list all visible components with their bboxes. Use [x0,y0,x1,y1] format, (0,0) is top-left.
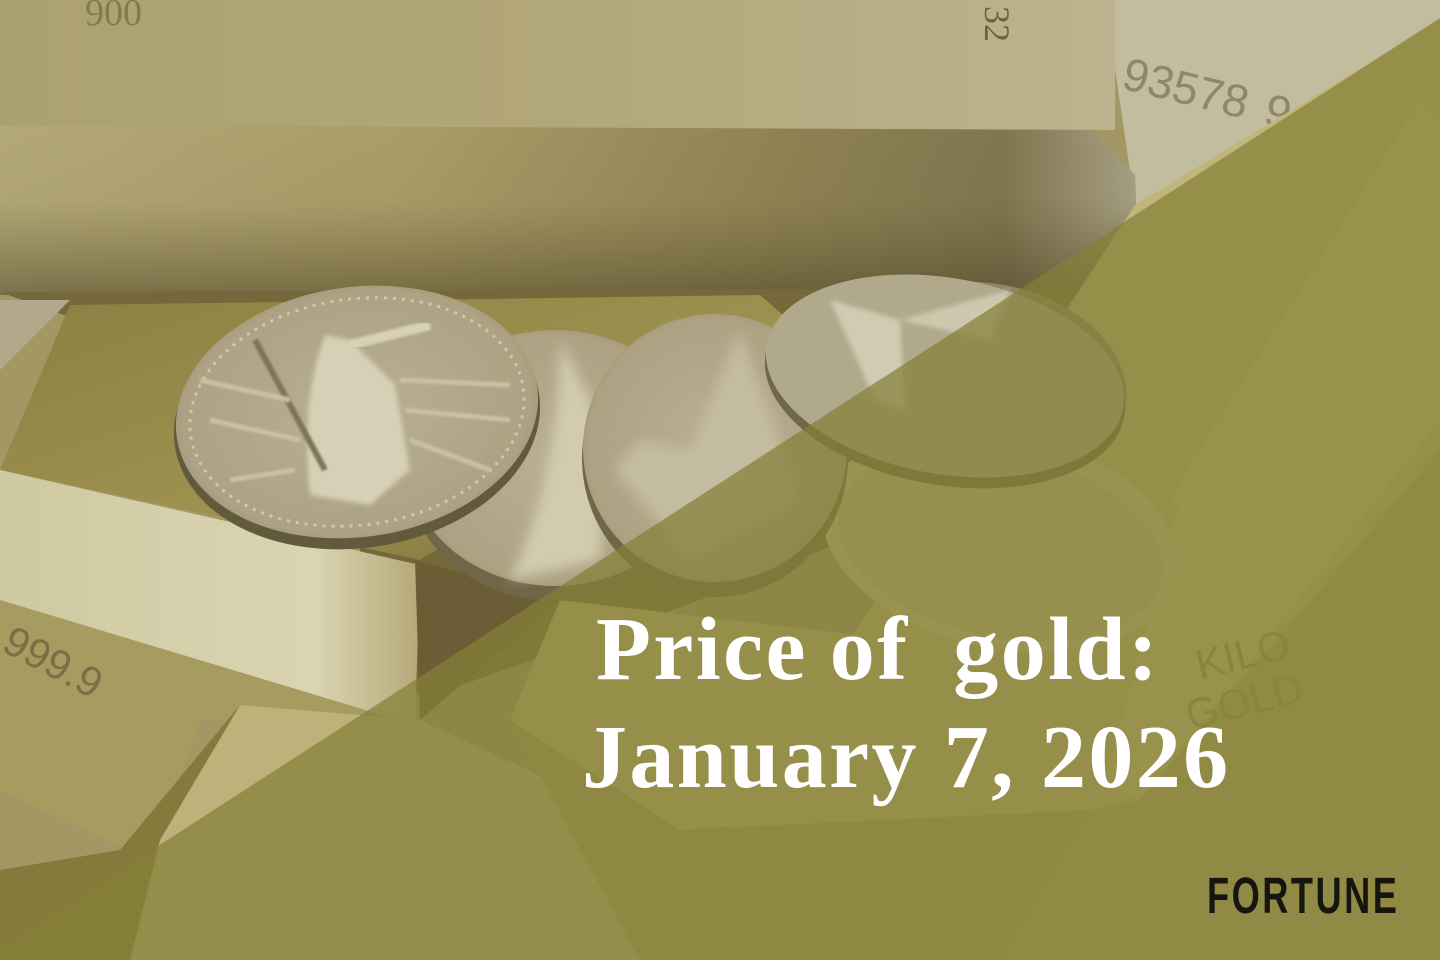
coin: middle back [405,330,705,601]
dark gap behind coins [0,288,1140,700]
title: Price of gold: [596,600,1160,699]
left gold bar [0,295,800,860]
right bars [510,20,1440,960]
right bars: KILO [1191,620,1295,689]
lower bar [0,705,680,960]
back right bar: 93578 [1118,47,1254,129]
logo: Fortune: FORTUNE [1207,867,1399,924]
coin: top right [748,248,1142,515]
coin: far right lower [801,257,1199,683]
right bars: GOLD [1181,664,1308,739]
coin: front Liberty [157,263,557,572]
title [582,600,1231,807]
top gold bar: 32 [977,6,1017,42]
back right bar [1105,0,1440,205]
coin: centre right [582,314,848,597]
title: January 7, 2026 [582,708,1231,807]
back right bar: 9 [1260,83,1297,140]
top gold bar [0,0,1140,295]
